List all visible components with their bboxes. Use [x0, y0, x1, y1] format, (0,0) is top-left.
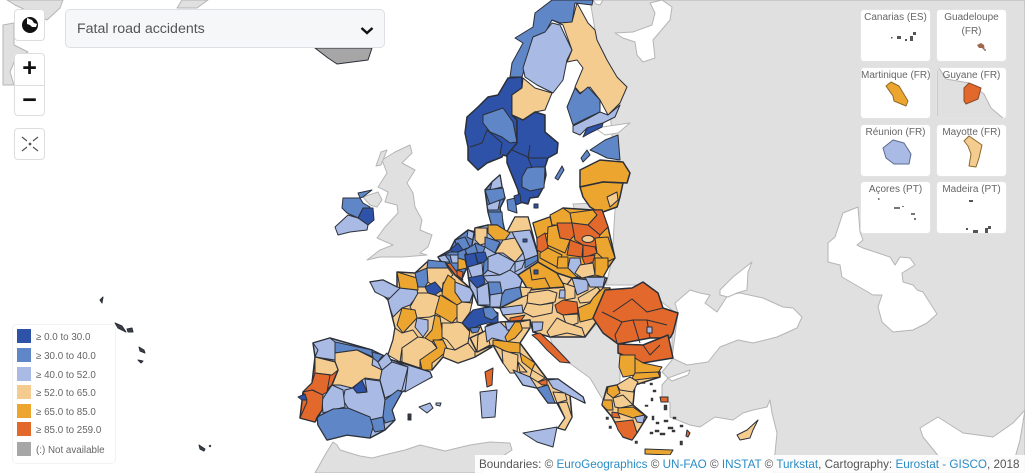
- icon: collapse arrows: [22, 136, 38, 152]
- button: fit map: [14, 128, 45, 160]
- legend item: 65 to 85: [17, 404, 96, 418]
- legend item: 52 to 65: [17, 385, 96, 399]
- regions: Austria and Slovenia: [500, 287, 557, 332]
- legend item: not available: (:) Not available: [36, 445, 105, 456]
- regions: Norway: [465, 0, 593, 170]
- regions: Croatia: [532, 318, 585, 363]
- regions: Denmark: [485, 175, 538, 232]
- legend item: 0 to 30: ≥ 0.0 to 30.0: [36, 332, 90, 343]
- icon: minus: −: [22, 86, 37, 114]
- inset: Mayotte: Mayotte (FR): [942, 127, 1001, 138]
- regions: Czechia and Slovakia: [518, 262, 605, 300]
- legend item: 30 to 40: [17, 348, 96, 362]
- regions: Poland: [533, 208, 615, 278]
- regions: Baltic states: [580, 135, 630, 213]
- control: zoom in and out: [14, 53, 45, 116]
- legend item: 30 to 40: ≥ 30.0 to 40.0: [36, 351, 96, 362]
- regions: Portugal: [298, 357, 338, 422]
- button: globe: [14, 9, 45, 41]
- inset: Réunion: [860, 124, 931, 177]
- legend item: 65 to 85: ≥ 65.0 to 85.0: [36, 407, 96, 418]
- regions: France: [370, 260, 492, 370]
- attribution: Boundaries: © EuroGeographics © UN-FAO © INSTAT © Turkstat, Cartography: Eurostat - GISCO, 2018: [479, 458, 1020, 471]
- inset: Madeira: [936, 181, 1007, 234]
- regions: Hungary: [555, 287, 610, 327]
- regions: Switzerland: [462, 307, 498, 333]
- dropdown: indicator select: [65, 9, 385, 48]
- regions: Benelux: [438, 230, 475, 280]
- islands: Aegean: [606, 382, 683, 445]
- icon: globe: [22, 17, 38, 33]
- icon: chevron: [360, 27, 374, 35]
- legend item: 40 to 52: ≥ 40.0 to 52.0: [36, 370, 96, 381]
- inset: Guyane: [936, 67, 1007, 119]
- legend item: 85 to 259: [17, 422, 101, 436]
- inset: Martinique: Martinique (FR): [861, 70, 930, 81]
- region: Cyprus: [737, 420, 758, 440]
- regions: Sweden: [507, 23, 572, 204]
- inset: Canarias: [860, 9, 931, 62]
- legend item: not available: [17, 442, 105, 456]
- regions: Greece: [602, 372, 690, 455]
- seas: White Sea, Gulf of Finland, Black Sea, Azov, Marmara, Caspian, Persian Gulf: [593, 0, 1025, 458]
- legend item: 52 to 65: ≥ 52.0 to 65.0: [36, 388, 96, 399]
- regions: Germany: [465, 217, 538, 308]
- dropdown label: Fatal road accidents: [77, 21, 205, 37]
- inset: Mayotte: [936, 124, 1007, 177]
- inset: Guadeloupe: Guadeloupe (FR): [944, 12, 999, 37]
- inset: Réunion: Réunion (FR): [865, 127, 926, 138]
- regions: Italy: [470, 320, 585, 447]
- regions: Finland: [552, 3, 627, 137]
- regions: Spain: [313, 338, 441, 440]
- legend item: 0 to 30: [17, 329, 90, 343]
- inset: Guyane: Guyane (FR): [943, 70, 1000, 81]
- icon: plus: [15, 54, 44, 86]
- inset: Açores: Açores (PT): [869, 184, 922, 195]
- inset: Guadeloupe: [936, 9, 1007, 62]
- legend: [13, 325, 115, 463]
- inset: Açores: [860, 181, 931, 234]
- inset: Martinique: [860, 67, 931, 119]
- icon: plus: +: [22, 54, 37, 82]
- islands: Atlantic archipelagos: [100, 297, 211, 451]
- region: Iceland, not available: [315, 48, 372, 64]
- regions: Bulgaria: [618, 335, 673, 377]
- regions: Romania: [593, 282, 678, 344]
- inset: Canarias: Canarias (ES): [864, 12, 927, 23]
- regions: Ireland: [335, 190, 374, 235]
- legend item: 85 to 259: ≥ 85.0 to 259.0: [36, 425, 101, 436]
- inset: Madeira: Madeira (PT): [942, 184, 1001, 195]
- regions: Central Europe underlay: [500, 278, 610, 337]
- legend item: 40 to 52: [17, 367, 96, 381]
